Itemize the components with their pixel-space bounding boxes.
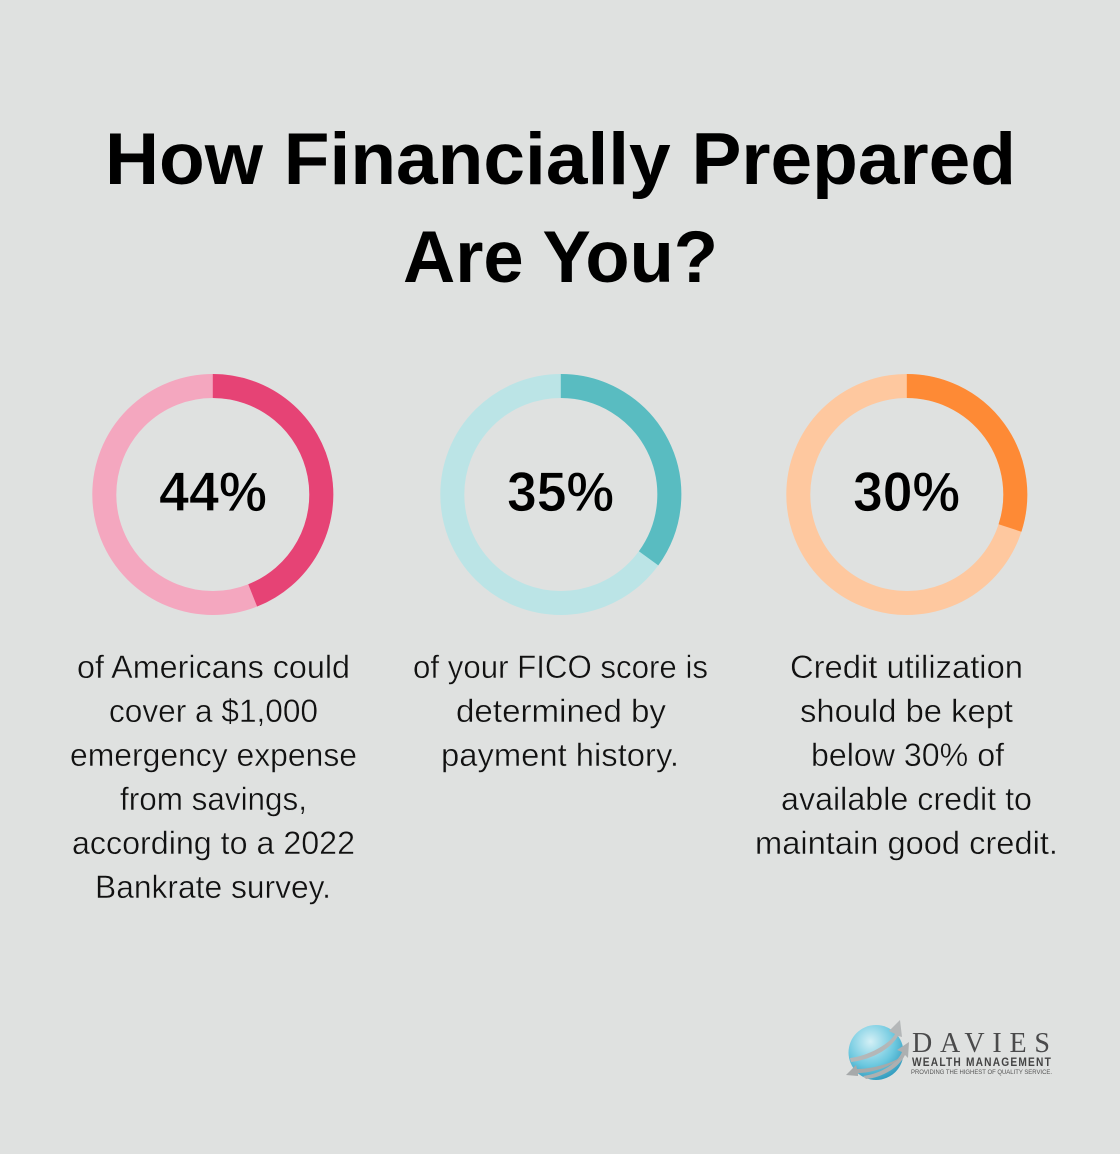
description: credit utilization: available credit to bbox=[781, 781, 1032, 817]
donut chart: 35% bbox=[452, 386, 669, 603]
logo wordmark: WEALTH MANAGEMENT bbox=[912, 1055, 1052, 1069]
description: credit utilization: Credit utilization bbox=[790, 649, 1023, 685]
value: 35%: 35% bbox=[507, 460, 614, 523]
title: How Financially Prepared bbox=[105, 119, 1016, 200]
donut chart: 44% bbox=[104, 386, 321, 603]
description: credit utilization: below 30% of bbox=[811, 737, 1004, 773]
description: FICO score: determined by bbox=[456, 693, 666, 729]
description: FICO score: of your FICO score is bbox=[413, 649, 708, 685]
description: Americans emergency savings: cover a $1,000 bbox=[109, 693, 318, 729]
donut chart: 30% bbox=[798, 386, 1015, 603]
description: Americans emergency savings: Bankrate survey. bbox=[95, 869, 331, 905]
icon: globe with arrows bbox=[846, 1020, 909, 1080]
logo: Davies Wealth Management bbox=[846, 1020, 1052, 1080]
logo wordmark: PROVIDING THE HIGHEST OF QUALITY SERVICE. bbox=[911, 1069, 1052, 1076]
value: 30%: 30% bbox=[853, 460, 960, 523]
logo wordmark bbox=[911, 1028, 1052, 1076]
description: Americans emergency savings: of Americans could bbox=[77, 649, 350, 685]
description: Americans emergency savings: emergency expense bbox=[70, 737, 357, 773]
description: credit utilization: should be kept bbox=[800, 693, 1013, 729]
title: Are You? bbox=[403, 217, 718, 298]
panel: 35% stat bbox=[413, 386, 708, 773]
panel: 44% stat bbox=[70, 386, 357, 905]
description: Americans emergency savings: according to a 2022 bbox=[72, 825, 355, 861]
description: credit utilization: maintain good credit. bbox=[755, 825, 1058, 861]
description: credit utilization bbox=[755, 649, 1058, 861]
logo wordmark: DAVIES bbox=[912, 1028, 1050, 1059]
value: 44%: 44% bbox=[159, 460, 267, 523]
panel: 30% stat bbox=[755, 386, 1058, 861]
description: FICO score: payment history. bbox=[441, 737, 679, 773]
title bbox=[105, 119, 1016, 298]
description: FICO score bbox=[413, 649, 708, 773]
description: Americans emergency savings bbox=[70, 649, 357, 905]
description: Americans emergency savings: from savings, bbox=[120, 781, 307, 817]
